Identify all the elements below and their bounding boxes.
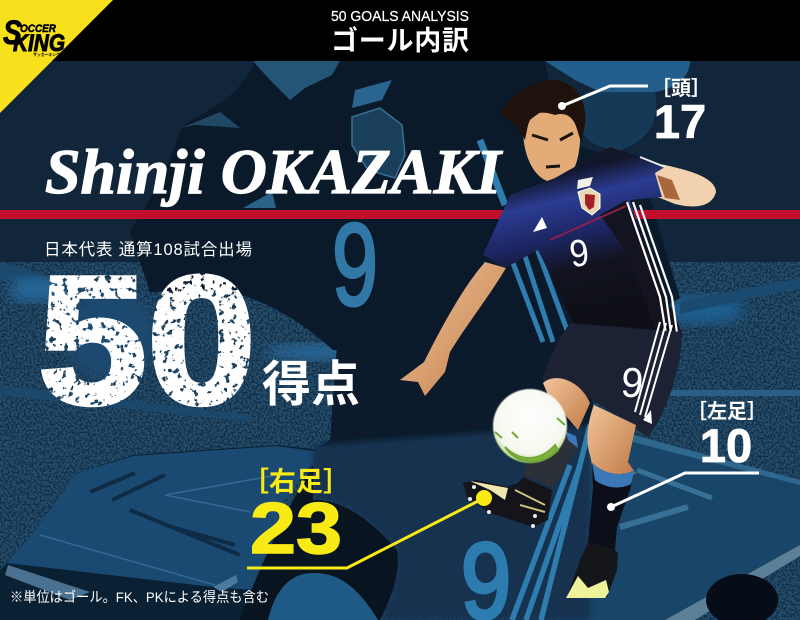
adidas mark <box>533 217 547 232</box>
background silhouette: hand shadow <box>578 92 656 150</box>
neck and face <box>523 105 580 182</box>
right foot leader dot <box>476 490 492 506</box>
right sock band <box>566 432 578 448</box>
background silhouette: lower stripes <box>512 425 590 620</box>
stadium pitch right <box>503 430 800 620</box>
left boot sole <box>566 576 609 598</box>
left foot label: ［左足］ <box>687 400 767 423</box>
right boot gold trim <box>515 490 545 512</box>
head leader dot <box>558 102 566 110</box>
right sock <box>522 435 578 487</box>
callout: head <box>558 77 711 148</box>
left foot value: 10 <box>700 419 752 472</box>
jersey number: 9 <box>567 232 592 276</box>
header band <box>0 0 800 61</box>
jersey stripes <box>627 202 678 340</box>
jersey flag patch <box>577 177 593 189</box>
background silhouette: number 9: 9 <box>332 199 378 330</box>
shorts stripes <box>635 322 672 417</box>
fist shading <box>657 175 680 200</box>
right foot leader line <box>247 498 484 568</box>
jersey crest <box>578 188 600 215</box>
background silhouette: dark upper torso <box>130 61 680 350</box>
right boot toe <box>470 481 508 500</box>
left boot <box>567 543 618 597</box>
total goals number: 50 <box>38 238 256 442</box>
right forearm <box>650 162 716 206</box>
shorts number: 9 <box>619 358 645 407</box>
jersey <box>483 147 683 335</box>
left sock band <box>592 463 635 487</box>
background silhouette: dark curve <box>240 465 398 620</box>
shorts <box>542 323 682 437</box>
background silhouette: flag patch <box>352 80 392 108</box>
logo wordmark: S <box>3 14 22 52</box>
head leader line <box>562 86 648 106</box>
background silhouette: forearm <box>268 573 378 620</box>
right boot <box>463 477 552 527</box>
header subtitle: 50 GOALS ANALYSIS <box>331 8 469 25</box>
background silhouette: lower jersey <box>313 425 590 620</box>
left leg <box>587 405 636 474</box>
logo wordmark: OCCER <box>20 23 56 35</box>
stadium stands <box>0 262 800 620</box>
background silhouette: adidas logo <box>243 192 276 208</box>
head label: ［頭］ <box>651 77 711 100</box>
logo wordmark: サッカーキング <box>33 51 60 57</box>
goals unit: 得点 <box>262 358 360 412</box>
footnote: ※単位はゴール。FK、PKによる得点も含む <box>10 589 269 605</box>
sleeve trim <box>640 157 665 167</box>
callout: right foot <box>242 467 492 569</box>
left foot leader line <box>611 473 759 507</box>
right boot studs <box>468 485 537 528</box>
background silhouette: JFA emblem <box>352 108 405 178</box>
callout: left foot <box>607 400 767 511</box>
stadium pitch left <box>0 445 320 620</box>
background silhouette: upper stripe <box>480 140 505 205</box>
background silhouette: hand <box>545 61 690 92</box>
red bar <box>0 210 800 219</box>
hair <box>500 80 585 142</box>
player cutout <box>400 80 716 598</box>
player name: Shinji OKAZAKI <box>45 137 504 207</box>
left foot leader dot <box>607 503 615 511</box>
background silhouette: dark waist <box>313 340 600 450</box>
background silhouette: neck <box>253 61 340 100</box>
header title: ゴール内訳 <box>331 25 469 56</box>
right foot label: ［右足］ <box>242 467 350 497</box>
caps text: 日本代表 通算108試合出場 <box>44 240 252 259</box>
right thigh <box>543 378 590 430</box>
shorts adidas mark <box>643 410 652 424</box>
jersey side panel <box>600 200 682 340</box>
left sock <box>588 463 635 550</box>
jersey chest line <box>550 206 626 240</box>
background silhouette: shoulder highlight <box>181 112 240 128</box>
background silhouette: sleeve stripes <box>513 243 567 342</box>
left arm <box>400 262 506 396</box>
crest centre <box>585 194 595 210</box>
logo wordmark: KING <box>13 30 65 57</box>
ball <box>493 389 567 463</box>
eyes and mouth <box>532 133 573 167</box>
logo: Soccer King <box>0 0 113 113</box>
right foot value: 23 <box>250 489 342 569</box>
logo wordmark <box>3 14 65 57</box>
head value: 17 <box>654 95 706 148</box>
ball green marks <box>495 418 565 462</box>
